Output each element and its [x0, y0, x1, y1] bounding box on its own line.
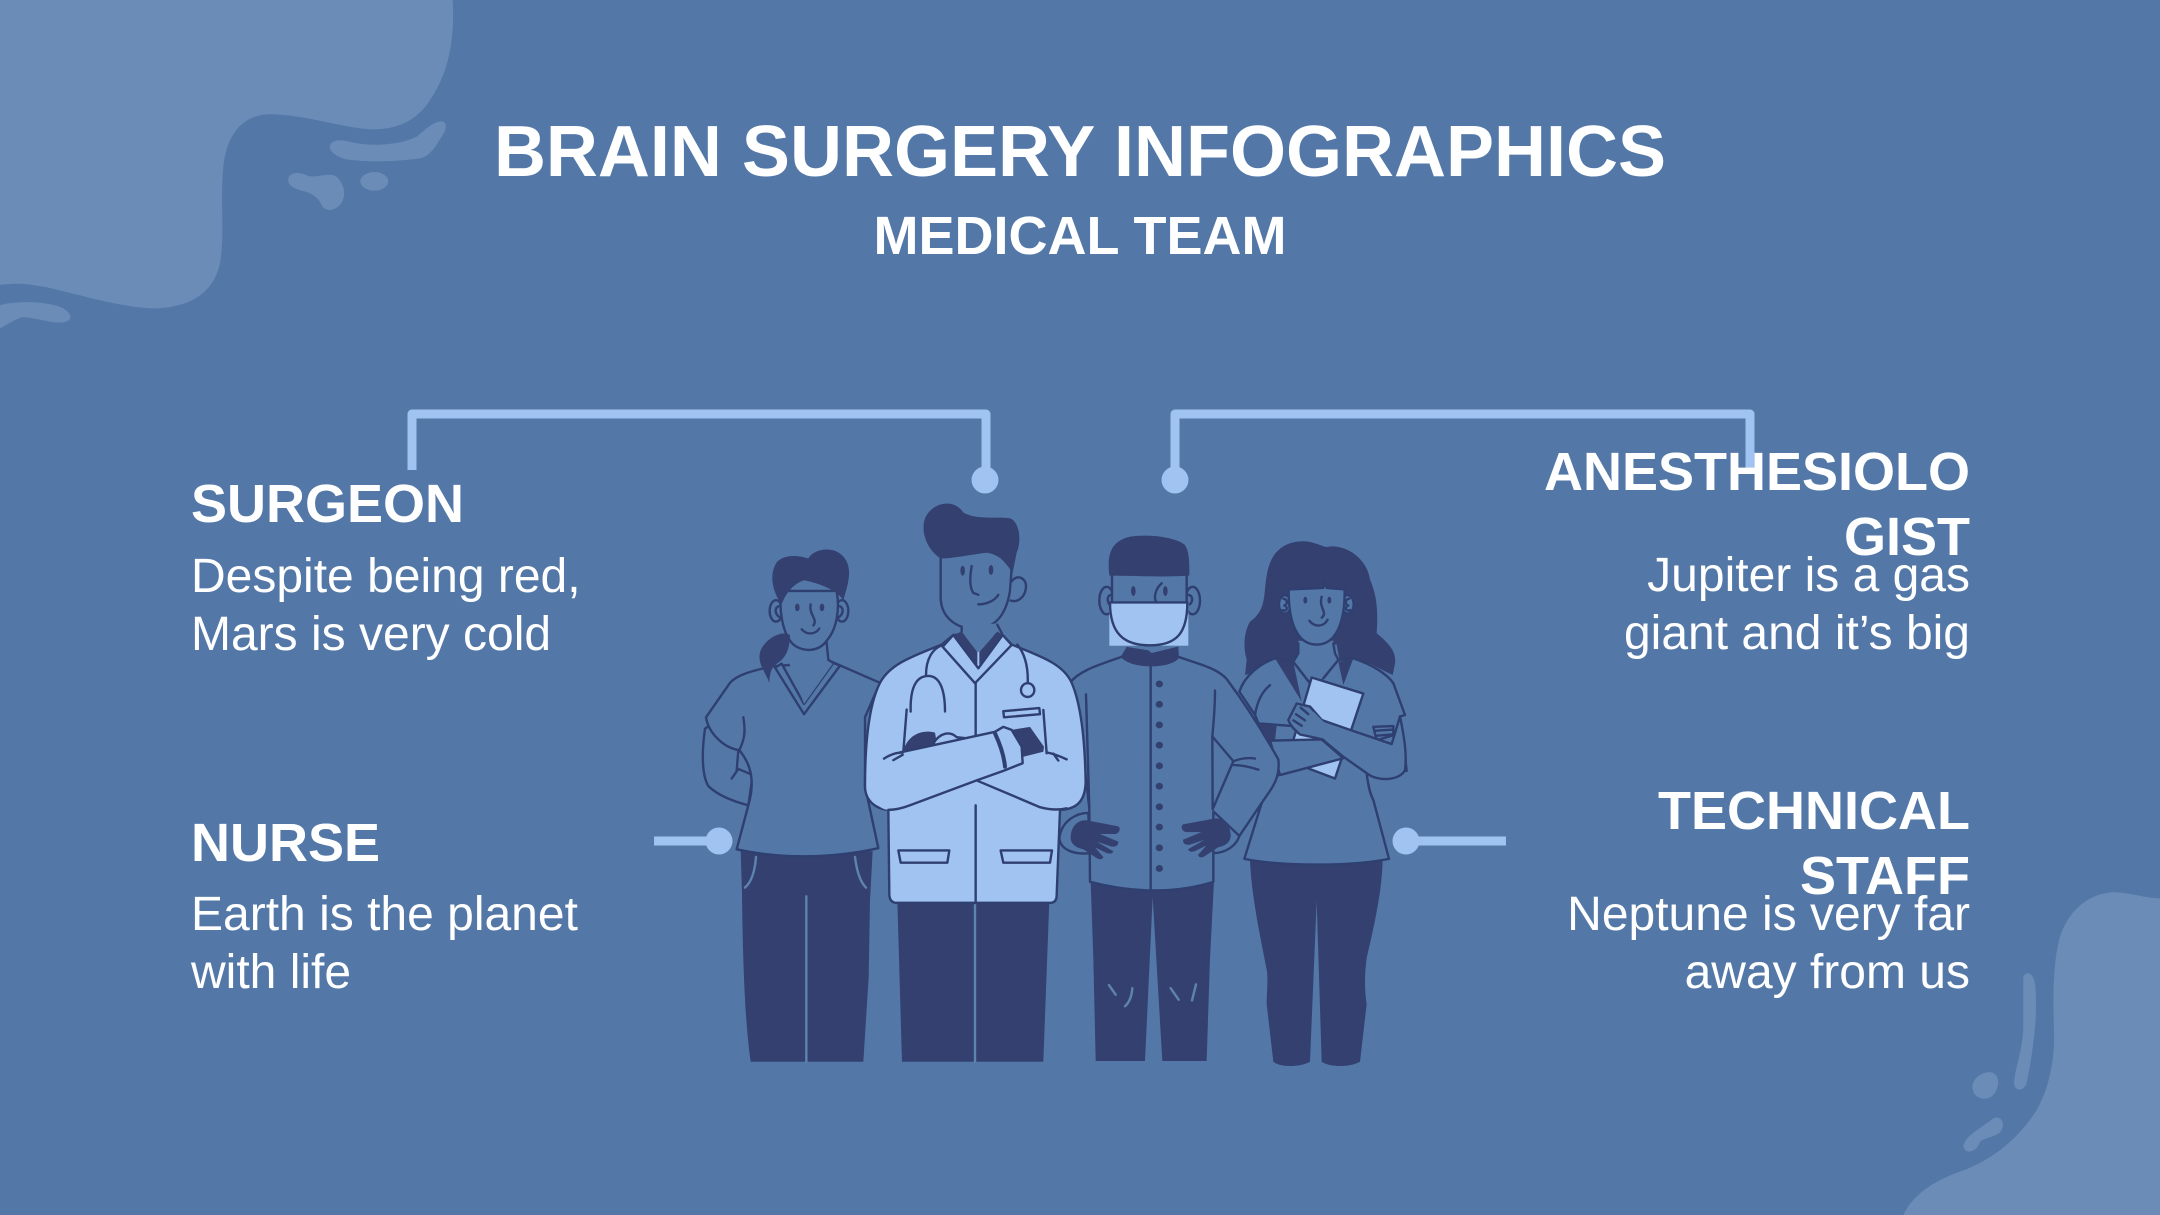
text block: anesthesiologist: Jupiter is a gas: [1647, 549, 1970, 602]
connector: nurse: [654, 828, 732, 854]
connector: surgeon bracket: [412, 414, 998, 494]
decorative blob: top left: [0, 0, 453, 328]
text block: anesthesiologist: ANESTHESIOLO: [1544, 442, 1970, 502]
figure: woman with tablet: [1239, 541, 1407, 1066]
connector: anesthesiologist bracket: [1162, 414, 1750, 494]
text block: technical staff: TECHNICAL: [1658, 781, 1970, 841]
text block: nurse: [190, 813, 578, 999]
subheading: medical team: MEDICAL TEAM: [874, 206, 1286, 266]
text block: technical staff: STAFF: [1800, 846, 1970, 906]
figure: masked surgeon: [1059, 536, 1279, 1061]
text block: surgeon: Despite being red,: [191, 550, 581, 603]
text block: nurse: NURSE: [191, 813, 380, 873]
text block: technical staff: away from us: [1685, 946, 1970, 999]
text block: nurse: with life: [190, 946, 351, 999]
figure: nurse with ponytail: [703, 549, 880, 1062]
figure: doctor in lab coat: [865, 504, 1086, 1062]
text block: anesthesiologist: giant and it’s big: [1624, 607, 1970, 660]
text block: surgeon: [191, 474, 581, 661]
decorative blob: bottom right: [1903, 892, 2160, 1215]
text block: technical staff: Neptune is very far: [1567, 888, 1970, 941]
text block: nurse: Earth is the planet: [191, 888, 578, 941]
text block: technical staff: [1567, 781, 1970, 999]
text block: anesthesiologist: GIST: [1844, 507, 1970, 567]
text block: anesthesiologist: [1544, 442, 1970, 660]
text block: surgeon: Mars is very cold: [191, 608, 551, 661]
connector: technical staff: [1392, 828, 1506, 854]
heading: brain surgery infographics: BRAIN SURGERY INFOGRAPHICS: [494, 112, 1666, 192]
text block: surgeon: SURGEON: [191, 474, 464, 534]
